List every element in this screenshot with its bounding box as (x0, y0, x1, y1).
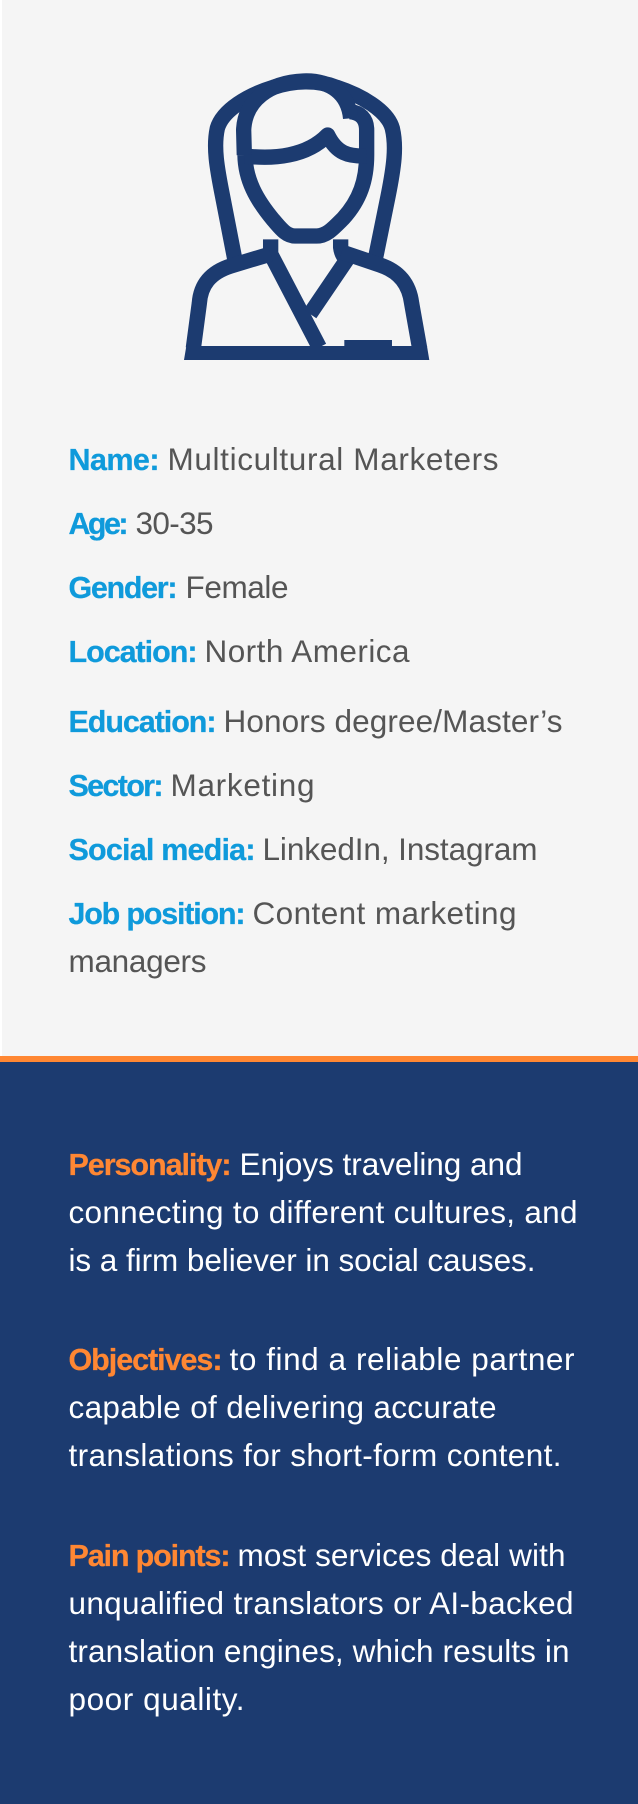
text: name: Name: (68, 443, 160, 477)
text: personality: is a firm believer in social causes. (68, 1242, 536, 1278)
panel: details background (0, 1062, 638, 1804)
orange divider band (0, 1056, 638, 1062)
text: age: 30-35 (136, 505, 214, 541)
text: pain points: translation engines, which results in (68, 1633, 570, 1669)
text: objectives (68, 1341, 574, 1473)
text: sector: Sector: (68, 769, 164, 803)
text: education: Education: (68, 705, 216, 739)
text: location (68, 633, 410, 669)
text: objectives: capable of delivering accurate (68, 1389, 496, 1425)
text: pain points: poor quality. (68, 1681, 244, 1717)
text: sector (68, 767, 314, 803)
text: personality: Enjoys traveling and (240, 1146, 522, 1182)
text: social media: LinkedIn, Instagram (262, 831, 538, 867)
text: pain points: Pain points: (68, 1539, 230, 1573)
icon: woman avatar (184, 81, 429, 360)
text: age: Age: (68, 507, 128, 541)
text: pain points: most services deal with (238, 1537, 566, 1573)
text: education (68, 703, 562, 739)
text: gender: Female (186, 569, 288, 605)
text: job position: Job position: (68, 897, 246, 931)
panel: profile background (2, 0, 638, 1056)
text: location: Location: (68, 635, 198, 669)
text: personality: Personality: (68, 1148, 232, 1182)
text: job position (68, 895, 516, 979)
text: gender (68, 569, 288, 605)
text: name: Multicultural Marketers (168, 441, 498, 477)
text: pain points: unqualified translators or AI-backed (68, 1585, 574, 1621)
text: objectives: Objectives: (68, 1343, 222, 1377)
text: education: Honors degree/Master’s (224, 703, 562, 739)
text: job position: managers (68, 943, 206, 979)
text: social media (68, 831, 538, 867)
text: gender: Gender: (68, 571, 178, 605)
text: objectives: to find a reliable partner (230, 1341, 574, 1377)
text: personality: connecting to different cultures, and (68, 1194, 578, 1230)
text: sector: Marketing (170, 767, 314, 803)
text: location: North America (204, 633, 410, 669)
text: age (68, 505, 214, 541)
text: objectives: translations for short-form content. (68, 1437, 562, 1473)
text: personality (68, 1146, 578, 1278)
text: pain points (68, 1537, 574, 1717)
text: social media: Social media: (68, 833, 256, 867)
text: job position: Content marketing (252, 895, 516, 931)
